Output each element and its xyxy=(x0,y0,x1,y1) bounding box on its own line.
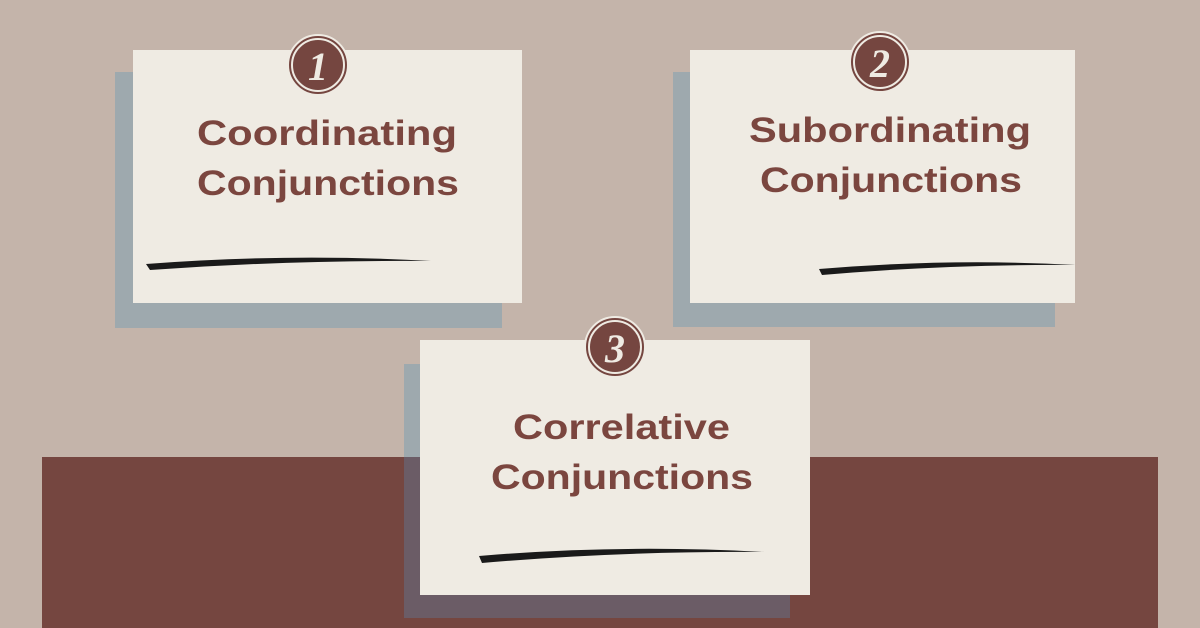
card 2: subordinating: Conjunctions xyxy=(760,161,1022,200)
card 1: coordinating xyxy=(115,35,522,328)
title 3: Correlative xyxy=(513,408,730,447)
number 2: 2 xyxy=(869,41,890,86)
number 1 xyxy=(288,35,348,95)
title 2: Subordinating xyxy=(749,111,1031,150)
number 2 xyxy=(850,32,910,92)
underline 2 xyxy=(819,262,1076,275)
card 1: coordinating: Conjunctions xyxy=(197,164,459,203)
number 3: 3 xyxy=(604,326,625,371)
dark bottom band xyxy=(42,457,1158,628)
underline 1 xyxy=(146,258,431,270)
card 2: subordinating xyxy=(673,32,1076,327)
number 3 xyxy=(585,317,645,377)
number 1: 1 xyxy=(308,44,328,89)
card 3: correlative xyxy=(404,317,810,618)
title 1: Coordinating xyxy=(197,114,457,153)
underline 3 xyxy=(479,549,764,563)
card 3: correlative: Conjunctions xyxy=(491,458,753,497)
